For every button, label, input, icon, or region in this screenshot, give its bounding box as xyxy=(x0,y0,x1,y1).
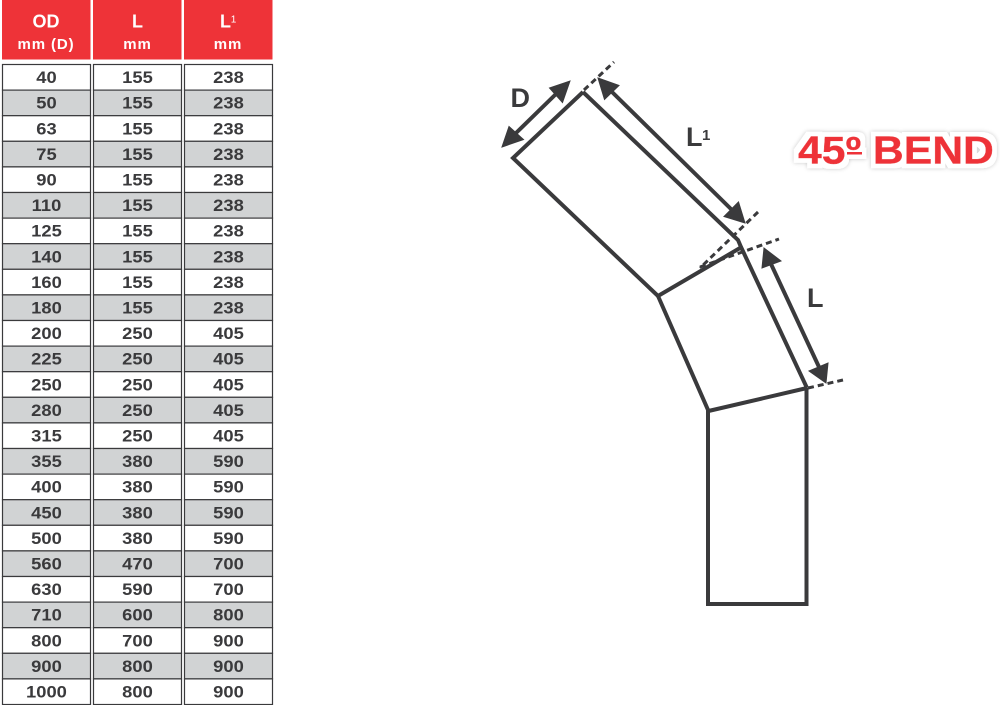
row 710: 710 xyxy=(31,605,62,625)
row 75: 155 xyxy=(122,145,153,164)
row 250: 250 xyxy=(122,375,153,394)
row 355: 355 xyxy=(31,452,62,471)
label: D: D xyxy=(510,83,530,113)
table header: mm xyxy=(123,36,152,53)
row 630 xyxy=(2,576,272,602)
row 180: 238 xyxy=(213,298,244,317)
row 710: 800 xyxy=(213,605,244,625)
row 90: 238 xyxy=(213,170,244,189)
row 200: 200 xyxy=(31,324,62,343)
row 110: 110 xyxy=(32,196,61,215)
row 560: 560 xyxy=(31,554,62,573)
row 450: 450 xyxy=(31,503,62,522)
row 560 xyxy=(2,551,272,576)
row 280: 280 xyxy=(31,401,62,420)
row 315: 315 xyxy=(31,426,62,445)
row 225: 225 xyxy=(31,349,62,369)
row 900: 800 xyxy=(122,657,153,676)
row 560: 470 xyxy=(122,554,153,573)
row 40: 238 xyxy=(213,68,244,87)
row 125: 125 xyxy=(31,221,62,241)
arrow: L xyxy=(762,248,828,383)
row 110 xyxy=(2,192,272,218)
row 1000: 1000 xyxy=(26,682,67,701)
row 140: 238 xyxy=(213,247,244,266)
arrow: L1 xyxy=(598,78,745,223)
row 125: 238 xyxy=(213,221,244,241)
row 160: 238 xyxy=(213,273,244,292)
row 1000 xyxy=(2,679,272,704)
dimensions table xyxy=(2,0,272,704)
row 800: 800 xyxy=(31,631,62,650)
row 800: 700 xyxy=(122,631,153,650)
row 315: 405 xyxy=(213,426,244,445)
row 50: 50 xyxy=(36,93,57,113)
row 225 xyxy=(2,346,272,372)
row 315: 250 xyxy=(122,426,153,445)
row 355: 380 xyxy=(122,452,153,471)
row 710 xyxy=(2,602,272,628)
row 50: 238 xyxy=(213,93,244,113)
row 63: 63 xyxy=(36,119,57,138)
row 500: 380 xyxy=(122,529,153,548)
table header: mm (D) xyxy=(17,36,75,53)
row 180: 180 xyxy=(31,298,62,317)
row 110: 155 xyxy=(122,196,153,215)
row 800: 900 xyxy=(213,631,244,650)
row 250 xyxy=(2,372,272,397)
label: L: L xyxy=(807,283,824,313)
row 400: 590 xyxy=(213,477,244,497)
row 75: 75 xyxy=(36,145,57,164)
row 63 xyxy=(2,116,272,141)
row 500: 590 xyxy=(213,529,244,548)
row 250: 250 xyxy=(31,375,62,394)
table header: mm xyxy=(214,36,242,53)
row 1000: 900 xyxy=(213,682,244,701)
label: L1: 1 xyxy=(702,127,710,144)
row 160: 160 xyxy=(31,273,62,292)
row 90: 155 xyxy=(122,170,153,189)
row 710: 600 xyxy=(122,605,153,625)
row 40: 155 xyxy=(122,68,153,87)
row 900 xyxy=(2,653,272,679)
row 200 xyxy=(2,320,272,346)
table header: OD xyxy=(32,12,60,32)
bend outline xyxy=(513,92,807,604)
row 450: 590 xyxy=(213,503,244,522)
row 200: 250 xyxy=(122,324,153,343)
row 355: 590 xyxy=(213,452,244,471)
row 280: 405 xyxy=(213,401,244,420)
row 450: 380 xyxy=(122,503,153,522)
table header: L xyxy=(132,12,143,32)
row 90 xyxy=(2,167,272,192)
row 75: 238 xyxy=(213,145,244,164)
row 400: 400 xyxy=(31,477,62,497)
row 180: 155 xyxy=(122,298,153,317)
dashed extension lines xyxy=(584,62,843,388)
row 250: 405 xyxy=(213,375,244,394)
arrow: D xyxy=(502,81,570,147)
row 225: 405 xyxy=(213,349,244,369)
label: L1 xyxy=(686,122,710,152)
row 800 xyxy=(2,628,272,653)
row 125 xyxy=(2,218,272,244)
row 160: 155 xyxy=(122,273,153,292)
row 630: 590 xyxy=(122,580,153,599)
row 280 xyxy=(2,397,272,423)
row 500 xyxy=(2,525,272,551)
row 110: 238 xyxy=(213,196,244,215)
row 630: 630 xyxy=(31,580,62,599)
bend diagram xyxy=(502,62,843,604)
row 40 xyxy=(2,64,272,90)
row 280: 250 xyxy=(122,401,153,420)
row 75 xyxy=(2,141,272,167)
row 900: 900 xyxy=(213,657,244,676)
row 140 xyxy=(2,244,272,269)
row 315 xyxy=(2,423,272,448)
row 125: 155 xyxy=(122,221,153,241)
row 630: 700 xyxy=(213,580,244,599)
row 500: 500 xyxy=(31,529,62,548)
table header: 1 xyxy=(231,14,237,26)
row 90: 90 xyxy=(36,170,57,189)
row 560: 700 xyxy=(213,554,244,573)
row 180 xyxy=(2,295,272,320)
row 400 xyxy=(2,474,272,500)
row 50: 155 xyxy=(122,93,153,113)
row 160 xyxy=(2,269,272,295)
table header: L xyxy=(220,12,231,32)
title: 45º BEND: 45º BEND xyxy=(798,128,994,172)
label: L1: L xyxy=(686,122,702,152)
row 900: 900 xyxy=(31,657,62,676)
row 355 xyxy=(2,448,272,474)
row 40: 40 xyxy=(36,68,57,87)
row 63: 238 xyxy=(213,119,244,138)
row 450 xyxy=(2,500,272,525)
table header xyxy=(2,0,272,60)
row 140: 140 xyxy=(31,247,62,266)
row 225: 250 xyxy=(122,349,153,369)
row 140: 155 xyxy=(122,247,153,266)
row 400: 380 xyxy=(122,477,153,497)
row 63: 155 xyxy=(122,119,153,138)
row 200: 405 xyxy=(213,324,244,343)
row 1000: 800 xyxy=(122,682,153,701)
row 50 xyxy=(2,90,272,116)
